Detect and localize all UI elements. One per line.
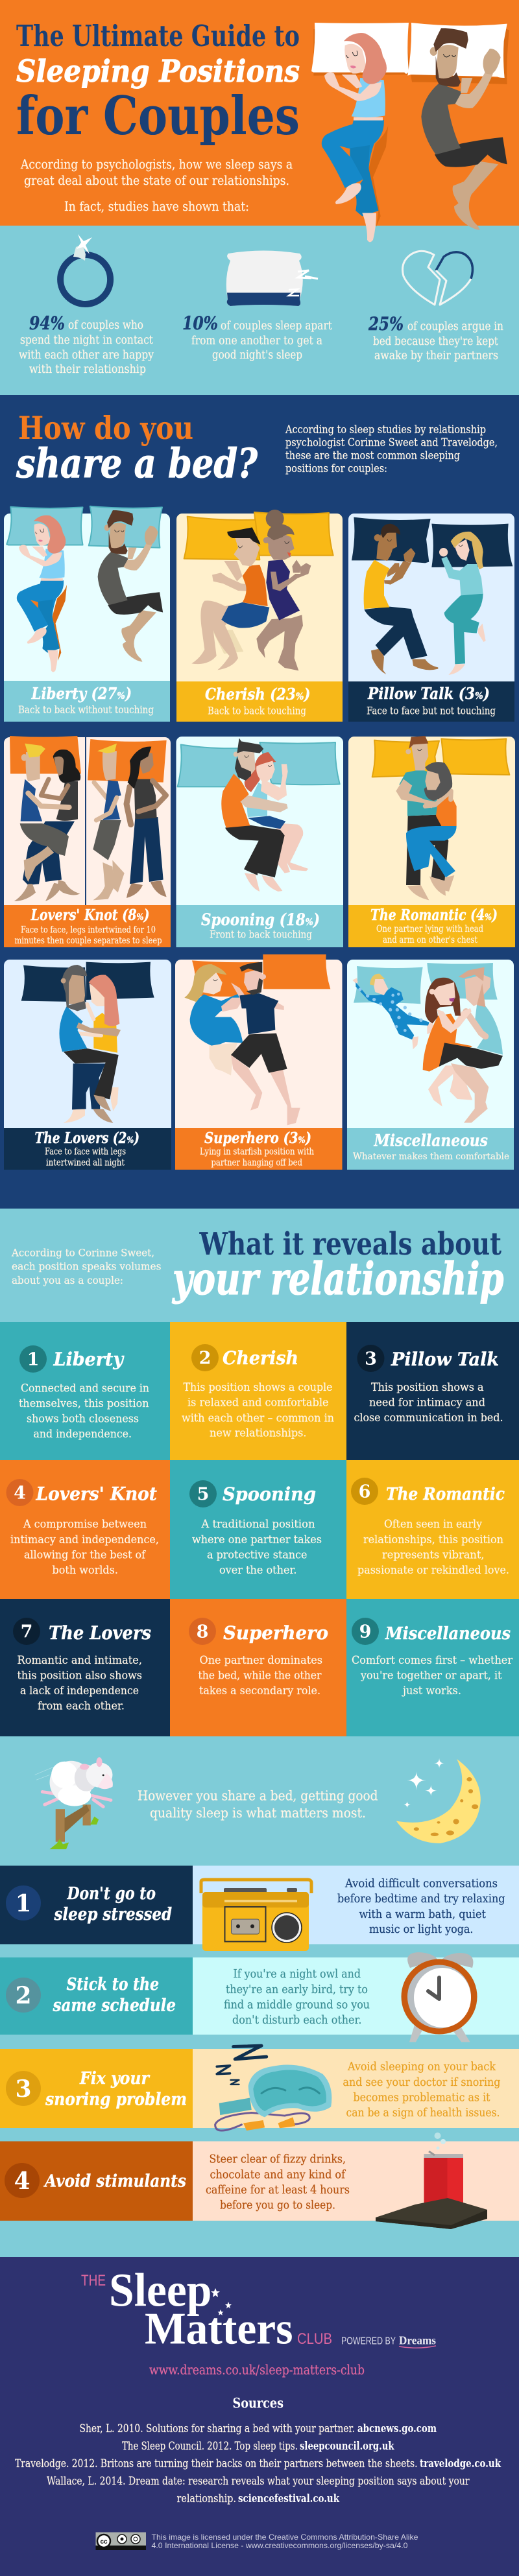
grid: cell 3 Pillow Talk: close communication in bed. xyxy=(354,1412,503,1424)
label xyxy=(35,1129,139,1168)
grid: cell 5 Spooning: A traditional position xyxy=(201,1518,315,1531)
tip 3: and see your doctor if snoring xyxy=(343,2075,501,2089)
link: www.dreams.co.uk/sleep-matters-club xyxy=(149,2362,365,2378)
grid: cell 7 The Lovers: Romantic and intimate, xyxy=(17,1654,142,1667)
tip 2: Stick to the xyxy=(66,1975,159,1994)
title xyxy=(16,19,300,147)
stat: 10 percent xyxy=(182,313,332,362)
grid: cell 3 Pillow Talk xyxy=(346,1322,519,1460)
grid: cell 5 Spooning: a protective stance xyxy=(207,1548,308,1561)
figure: left couple xyxy=(14,744,80,901)
grid: cell 5 Spooning xyxy=(170,1460,346,1599)
tip 3: Fix your xyxy=(79,2069,151,2088)
label: The Romantic (4%) xyxy=(370,906,498,924)
label: One partner lying with head xyxy=(376,924,483,934)
text: sleep quality message xyxy=(138,1788,378,1821)
intro text: According to Corinne Sweet, xyxy=(11,1246,154,1259)
label: Back to back touching xyxy=(208,705,306,717)
label: intertwined all night xyxy=(46,1158,125,1168)
grid: cell 4 Lovers' Knot xyxy=(0,1460,170,1599)
figure: right couple xyxy=(93,744,167,900)
tip 4: caffeine for at least 4 hours xyxy=(206,2183,350,2197)
grid: cell 1 Liberty: Liberty xyxy=(53,1349,125,1370)
tip 2: they're an early bird, try to xyxy=(226,1983,368,1996)
icon: alarm clock xyxy=(401,1952,477,2041)
stat: 10 percent: 10% xyxy=(182,313,218,334)
grid: cell 7 The Lovers: The Lovers xyxy=(49,1622,151,1644)
card: Pillow Talk xyxy=(348,514,514,722)
license text: This image is licensed under the Creative Commons Attribution-Share Alike xyxy=(152,2533,418,2542)
grid: cell 9 Miscellaneous xyxy=(346,1599,519,1736)
grid: cell 2 Cherish: This position shows a couple xyxy=(183,1381,332,1394)
figure: woman xyxy=(322,33,388,242)
label: minutes then couple separates to sleep xyxy=(14,936,162,946)
grid: cell 9 Miscellaneous: Miscellaneous xyxy=(385,1624,511,1644)
figure: man in yellow xyxy=(364,524,438,674)
label: Spooning (18%) xyxy=(201,910,320,929)
figure: woman in purple xyxy=(256,510,311,670)
grid: cell 1 Liberty: Connected and secure in xyxy=(21,1382,149,1395)
heading xyxy=(16,409,258,487)
logo: The Sleep Matters Club xyxy=(81,2264,436,2354)
tip 4: chocolate and any kind of xyxy=(210,2168,346,2181)
grid: cell 1 Liberty: themselves, this position xyxy=(19,1397,149,1410)
grid: cell 1 Liberty xyxy=(0,1322,170,1460)
grid: cell 3 Pillow Talk: 3 xyxy=(365,1349,377,1369)
stat: 94 percent: with each other are happy xyxy=(19,349,154,362)
tip 4: before you go to sleep. xyxy=(220,2198,335,2212)
logo: The Sleep Matters Club: Dreams xyxy=(399,2334,436,2347)
figure: man xyxy=(59,965,121,1123)
figure: woman xyxy=(245,752,308,873)
grid: cell 6 The Romantic: Often seen in early xyxy=(384,1518,482,1531)
label: Lying in starfish position with xyxy=(200,1146,314,1157)
label: Superhero (3%) xyxy=(204,1129,311,1147)
tip 3: becomes problematic as it xyxy=(353,2090,490,2105)
grid: cell 7 The Lovers: from each other. xyxy=(38,1700,125,1713)
stat: 94 percent: with their relationship xyxy=(29,363,146,376)
stat: 25 percent: awake by their partners xyxy=(374,349,498,362)
tip 4: Steer clear of fizzy drinks, xyxy=(209,2153,346,2166)
card: The Romantic xyxy=(348,736,515,947)
grid: cell 1 Liberty: and independence. xyxy=(34,1428,132,1441)
label xyxy=(367,684,496,717)
grid: cell 2 Cherish xyxy=(170,1322,346,1460)
label: Lovers' Knot (8%) xyxy=(30,906,150,924)
label: Back to back without touching xyxy=(18,704,154,716)
grid: cell 1 Liberty: shows both closeness xyxy=(27,1412,139,1425)
grid: cell 6 The Romantic: passionate or rekindled love. xyxy=(357,1564,509,1577)
grid: cell 4 Lovers' Knot: allowing for the best of xyxy=(24,1548,147,1561)
label: The Lovers (2%) xyxy=(35,1129,139,1147)
icon: broken heart xyxy=(402,251,472,305)
label xyxy=(205,685,310,717)
logo: The Sleep Matters Club: Sleep xyxy=(109,2264,211,2316)
tip 2: don't disturb each other. xyxy=(232,2013,362,2027)
label: partner hanging off bed xyxy=(211,1158,302,1168)
icon: creative commons badge xyxy=(96,2533,146,2550)
label: and arm on other's chest xyxy=(383,935,477,945)
grid: cell 6 The Romantic: relationships, this position xyxy=(363,1533,503,1546)
grid: cell 4 Lovers' Knot: A compromise between xyxy=(23,1518,147,1531)
grid: cell 9 Miscellaneous: 9 xyxy=(359,1622,371,1642)
grid: cell 6 The Romantic xyxy=(346,1460,519,1599)
grid: cell 3 Pillow Talk: need for intimacy and xyxy=(369,1397,485,1410)
intro text: great deal about the state of our relationships. xyxy=(24,173,289,188)
tip 2: same schedule xyxy=(53,1996,176,2015)
figure: man xyxy=(221,738,288,892)
grid: cell 3 Pillow Talk: This position shows a xyxy=(371,1381,484,1394)
panel: what it reveals xyxy=(0,1209,519,2257)
icon: cassette radio xyxy=(201,1880,311,1951)
tip 2 xyxy=(0,1957,519,2035)
card: Cherish xyxy=(176,510,343,722)
grid: cell 2 Cherish: is relaxed and comfortable xyxy=(187,1397,328,1410)
grid: cell 4 Lovers' Knot: Lovers' Knot xyxy=(36,1483,157,1504)
grid: cell 4 Lovers' Knot: 4 xyxy=(14,1483,26,1503)
grid: cell 2 Cherish: Cherish xyxy=(223,1347,298,1369)
figure: woman xyxy=(184,964,243,1076)
intro text: positions for couples: xyxy=(285,462,387,475)
tip 3 xyxy=(0,2049,519,2128)
license text: 4.0 International License - www.creativecommons.org/licenses/by-sa/4.0 xyxy=(152,2541,408,2550)
grid: cell 8 Superhero: One partner dominates xyxy=(200,1654,322,1667)
panel: statistics xyxy=(0,226,519,396)
label: Cherish (23%) xyxy=(205,685,310,703)
grid: cell 3 Pillow Talk: Pillow Talk xyxy=(391,1349,499,1370)
title: The Ultimate Guide to xyxy=(16,19,300,53)
title: Sleeping Positions xyxy=(16,54,300,89)
intro text: these are the most common sleeping xyxy=(285,449,460,462)
tip 1: with a warm bath, quiet xyxy=(359,1908,487,1921)
intro text xyxy=(11,1246,161,1286)
label xyxy=(201,910,320,940)
icon: sheep jumping fence xyxy=(35,1757,113,1849)
title: for Couples xyxy=(16,86,300,147)
card: The Lovers xyxy=(4,960,171,1170)
label: Face to face but not touching xyxy=(367,705,496,717)
intro text: According to sleep studies by relationship xyxy=(285,423,486,436)
sources list: Sher, L. 2010. Solutions for sharing a bed with your partner. xyxy=(79,2422,355,2435)
intro text xyxy=(285,423,498,475)
figure: man and woman embracing xyxy=(396,736,457,900)
grid: cell 5 Spooning: where one partner takes xyxy=(192,1533,322,1546)
intro text: According to psychologists, how we sleep says a xyxy=(20,157,293,172)
grid: cell 5 Spooning: over the other. xyxy=(219,1564,297,1577)
stat: 25 percent: bed because they're kept xyxy=(373,335,498,348)
intro text xyxy=(20,157,293,214)
tip 4: 4 xyxy=(14,2168,30,2195)
tip 2: find a middle ground so you xyxy=(224,1998,370,2011)
panel: footer xyxy=(0,2257,519,2576)
label xyxy=(353,1131,509,1162)
heading: share a bed? xyxy=(16,440,258,487)
sources heading: Sources xyxy=(232,2395,284,2411)
tip 1: music or light yoga. xyxy=(369,1922,474,1936)
grid: cell 5 Spooning: 5 xyxy=(197,1485,209,1504)
sources list: abcnews.go.com xyxy=(357,2422,437,2435)
intro text: about you as a couple: xyxy=(12,1274,123,1286)
tip 2: 2 xyxy=(15,1982,32,2009)
figure: man xyxy=(421,28,507,230)
sources list: sciencefestival.co.uk xyxy=(238,2492,340,2505)
grid: cell 8 Superhero: the bed, while the other xyxy=(199,1669,322,1682)
grid: cell 9 Miscellaneous: Comfort comes first – whether xyxy=(352,1654,513,1667)
grid: cell 1 Liberty: 1 xyxy=(27,1350,39,1369)
card: Liberty xyxy=(4,506,170,722)
grid: cell 8 Superhero xyxy=(170,1599,346,1736)
panel: hero xyxy=(0,0,519,226)
text: sleep quality message: quality sleep is what matters most. xyxy=(150,1805,366,1821)
stat: 94 percent xyxy=(19,313,154,376)
sources list: sleepcouncil.org.uk xyxy=(300,2440,394,2453)
tip 1 xyxy=(0,1866,519,1944)
tip 3: Avoid sleeping on your back xyxy=(347,2060,496,2074)
label xyxy=(370,906,498,945)
grid: cell 6 The Romantic: The Romantic xyxy=(386,1485,505,1504)
sources list: The Sleep Council. 2012. Top sleep tips. xyxy=(122,2440,298,2453)
label xyxy=(14,906,162,946)
card: Spooning xyxy=(176,737,439,947)
figure: child xyxy=(352,974,433,1049)
grid: cell 4 Lovers' Knot: intimacy and independence, xyxy=(10,1533,159,1546)
grid: cell 8 Superhero: Superhero xyxy=(223,1622,328,1644)
label xyxy=(200,1129,314,1168)
icon: sleeping Zs xyxy=(217,2046,267,2085)
grid: cell 8 Superhero: 8 xyxy=(197,1622,208,1642)
grid: cell 7 The Lovers xyxy=(0,1599,170,1736)
stat: 25 percent: of couples argue in xyxy=(407,320,503,333)
grid: cell 7 The Lovers: this position also shows xyxy=(17,1669,142,1682)
icon: cola can and chocolate xyxy=(376,2133,487,2229)
stat: 25 percent: 25% xyxy=(368,313,404,335)
tip 1: 1 xyxy=(15,1890,32,1917)
sources list: relationship. xyxy=(176,2492,236,2505)
tip 3: can be a sign of health issues. xyxy=(346,2106,500,2120)
label xyxy=(18,684,154,716)
stat: 94 percent: spend the night in contact xyxy=(20,334,153,347)
intro text: each position speaks volumes xyxy=(12,1260,161,1272)
heading: How do you xyxy=(18,409,193,447)
stat: 10 percent: good night's sleep xyxy=(212,349,302,362)
stat: 94 percent: of couples who xyxy=(68,319,143,332)
sources list: Travelodge. 2012. Britons are turning their backs on their partners between the sheets. xyxy=(15,2457,418,2470)
grid: cell 7 The Lovers: a lack of independence xyxy=(20,1684,139,1697)
label: Miscellaneous xyxy=(374,1131,488,1150)
label: Face to face, legs intertwined for 10 xyxy=(21,925,156,935)
tip 1: sleep stressed xyxy=(54,1905,172,1924)
icon: pillow xyxy=(226,250,318,306)
icon: crescent moon and stars xyxy=(396,1758,481,1843)
tip 4: Avoid stimulants xyxy=(43,2172,186,2192)
logo: The Sleep Matters Club: POWERED BY xyxy=(341,2335,396,2347)
tip 3: snoring problem xyxy=(45,2090,187,2110)
grid: cell 7 The Lovers: 7 xyxy=(21,1622,32,1642)
stat: 94 percent: 94% xyxy=(29,313,65,334)
figure: woman xyxy=(64,975,119,1123)
label: Whatever makes them comfortable xyxy=(353,1152,509,1162)
grid: cell 9 Miscellaneous: you're together or apart, it xyxy=(360,1669,502,1682)
tip 3: 3 xyxy=(15,2075,32,2103)
license text xyxy=(152,2533,418,2550)
grid: cell 4 Lovers' Knot: both worlds. xyxy=(52,1564,118,1577)
label: Pillow Talk (3%) xyxy=(367,684,490,703)
tip 4 xyxy=(0,2141,519,2221)
grid: cell 9 Miscellaneous: just works. xyxy=(402,1684,461,1697)
icon: ring xyxy=(60,234,110,304)
grid: cell 2 Cherish: with each other – common in xyxy=(182,1412,334,1425)
card: Superhero xyxy=(175,954,343,1170)
tip 1: Don't go to xyxy=(67,1884,156,1904)
grid: cell 6 The Romantic: represents vibrant, xyxy=(382,1548,484,1561)
illustration: hero couple xyxy=(311,23,509,242)
stat: 25 percent xyxy=(368,313,503,362)
grid: cell 2 Cherish: 2 xyxy=(199,1349,211,1368)
grid: cell 5 Spooning: Spooning xyxy=(223,1483,316,1505)
label: Face to face with legs xyxy=(45,1146,126,1157)
figure: woman and man xyxy=(423,967,503,1123)
grid: cell 6 The Romantic: 6 xyxy=(359,1482,370,1502)
tip 2: If you're a night owl and xyxy=(234,1967,361,1981)
grid: cell 2 Cherish: new relationships. xyxy=(210,1426,306,1439)
tip 1: Avoid difficult conversations xyxy=(344,1876,498,1891)
text: sleep quality message: However you share a bed, getting good xyxy=(138,1788,378,1804)
intro text: In fact, studies have shown that: xyxy=(64,199,249,214)
label: Liberty (27%) xyxy=(31,684,132,703)
card: Miscellaneous xyxy=(347,960,514,1170)
heading xyxy=(171,1226,503,1305)
grid: cell 8 Superhero: takes a secondary role. xyxy=(199,1684,320,1697)
label: Front to back touching xyxy=(210,928,312,940)
figure: woman in teal xyxy=(439,532,486,675)
figure: man xyxy=(221,962,300,1125)
card: Lovers' Knot xyxy=(4,736,171,947)
icon: sleep mask and ear plugs xyxy=(215,2064,332,2131)
panel: how do you share a bed xyxy=(0,395,519,1209)
logo: The Sleep Matters Club: Matters xyxy=(145,2304,293,2354)
icon: creative commons badge: cc xyxy=(100,2538,108,2546)
stat: 10 percent: from one another to get a xyxy=(191,335,322,348)
stat: 10 percent: of couples sleep apart xyxy=(221,320,332,333)
logo: The Sleep Matters Club: CLUB xyxy=(297,2330,332,2348)
sources list xyxy=(15,2422,501,2505)
panel: sleep tips xyxy=(0,1757,519,2229)
figure: man in orange xyxy=(191,527,269,670)
logo: The Sleep Matters Club: THE xyxy=(81,2272,106,2289)
